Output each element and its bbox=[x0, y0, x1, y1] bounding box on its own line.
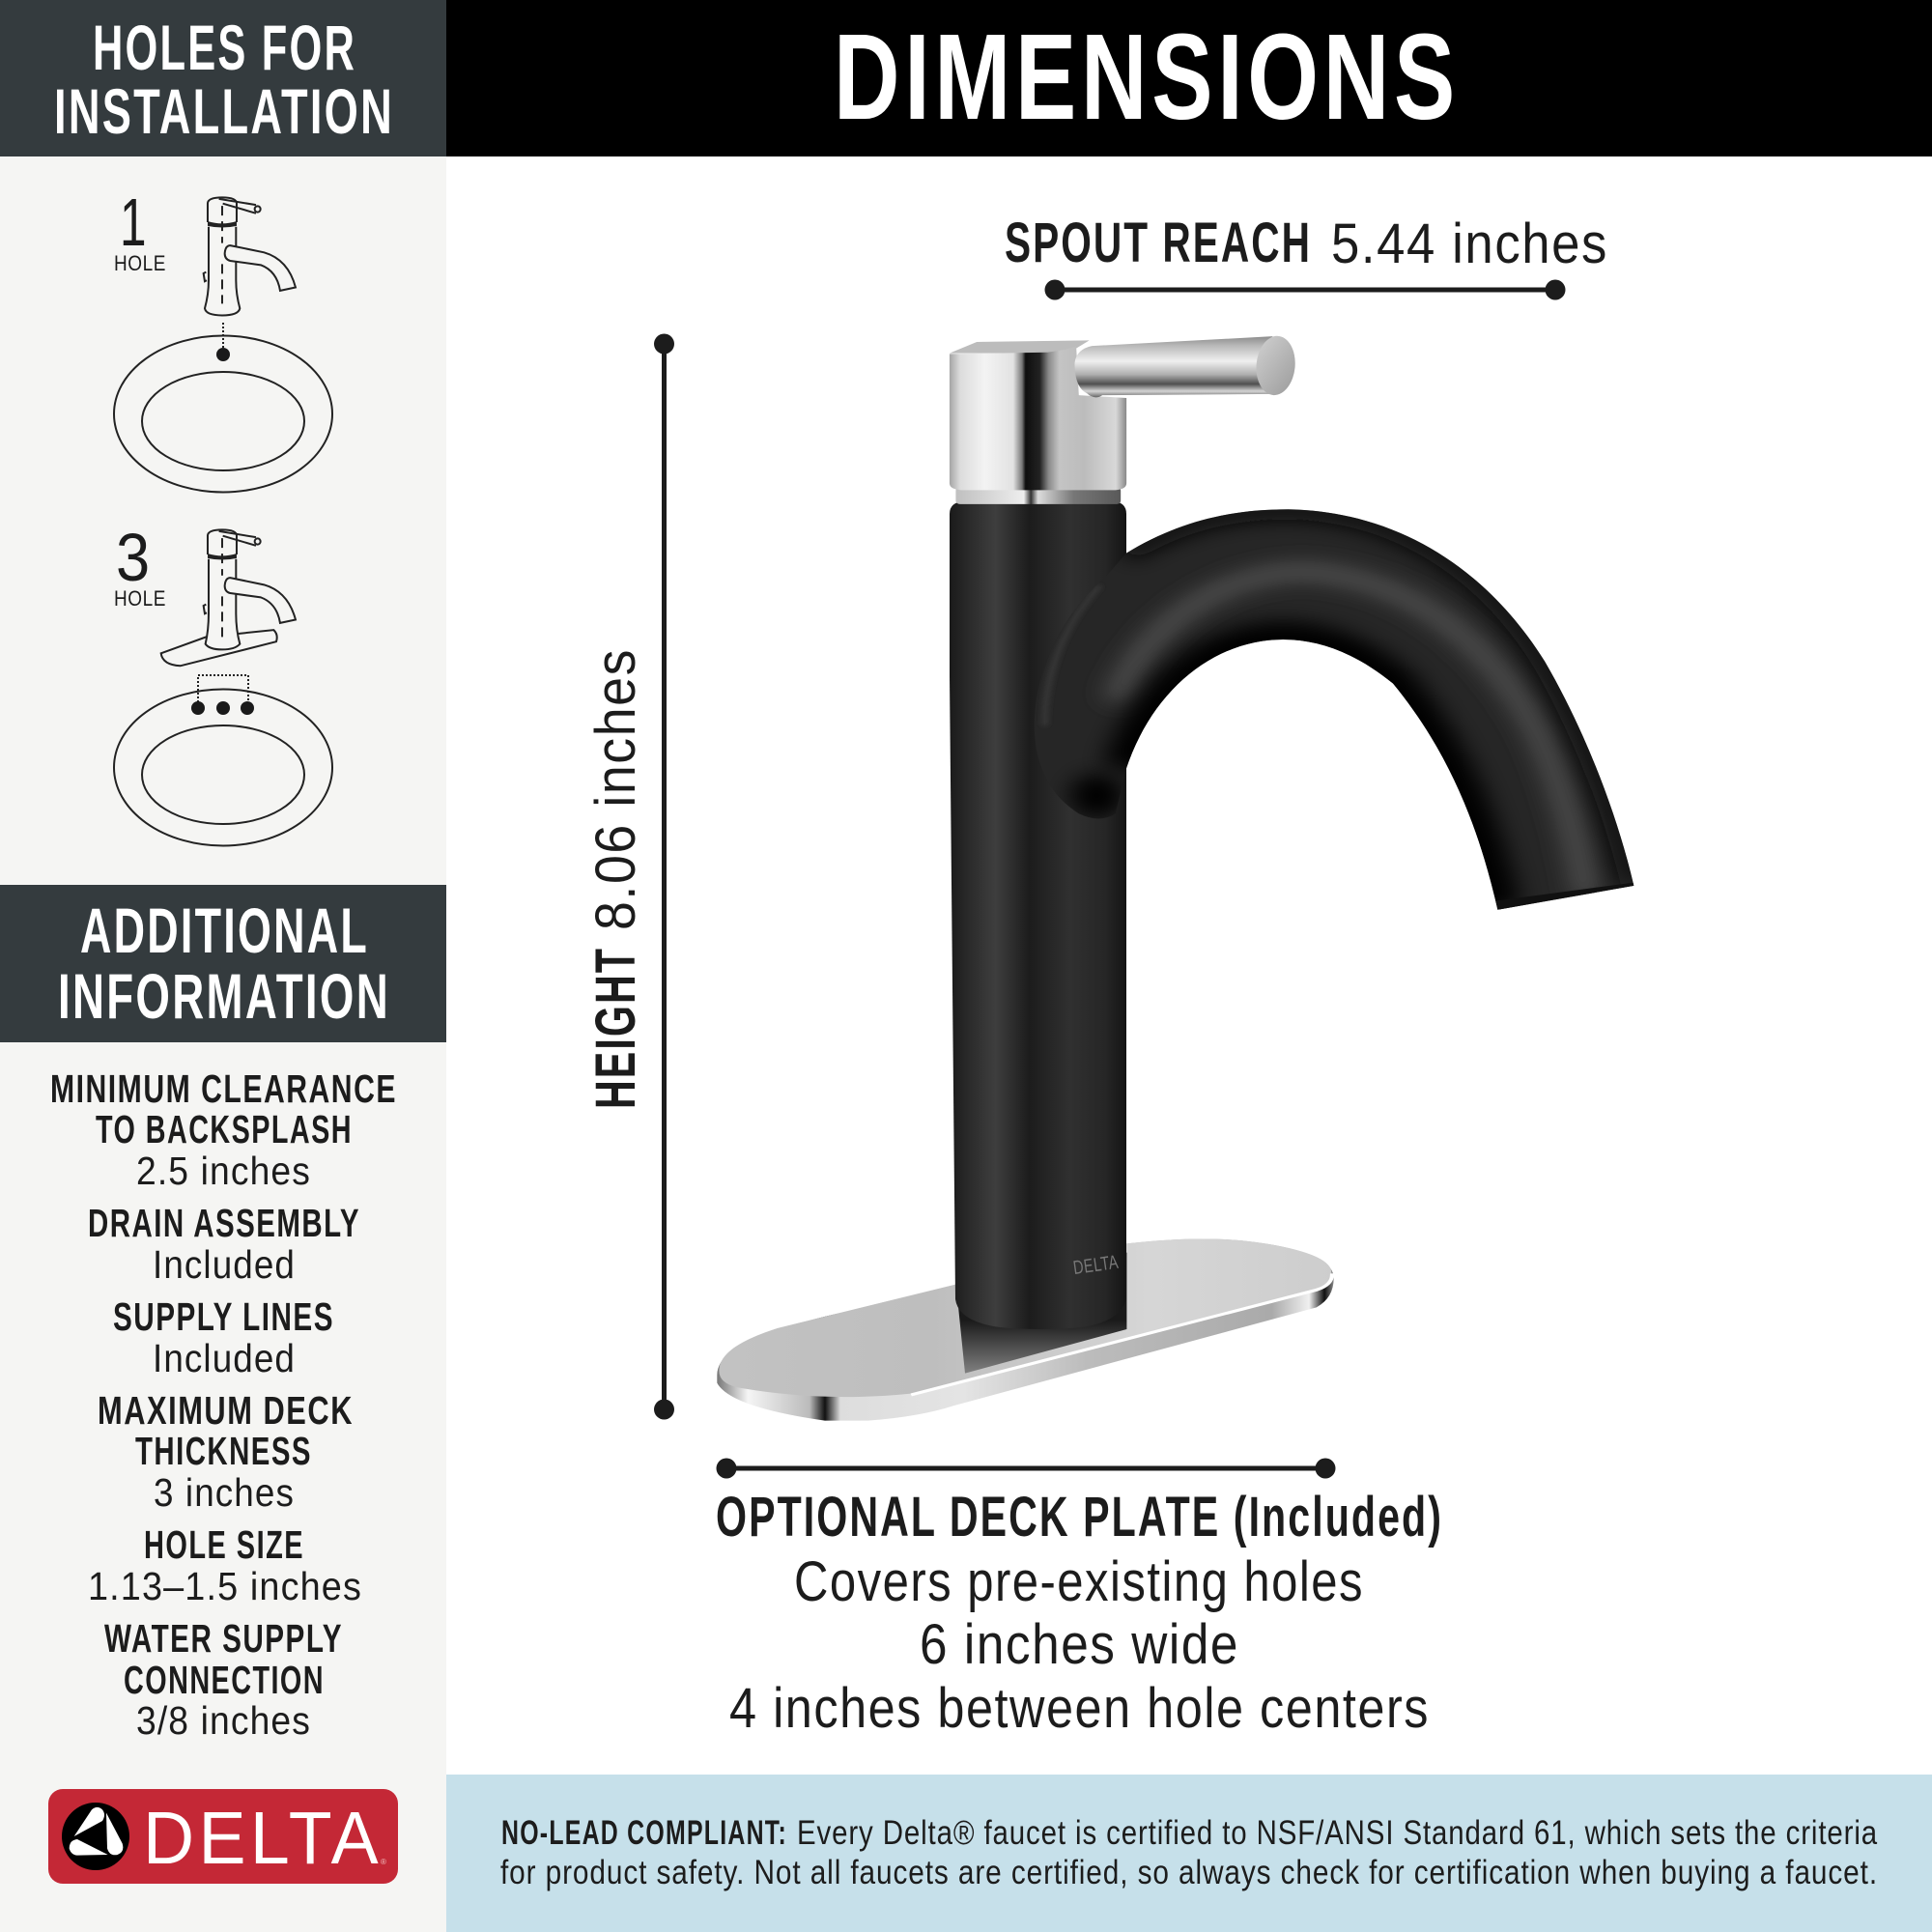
dimension: spout reach bbox=[1005, 212, 1608, 299]
dimension: spout reach: SPOUT REACH bbox=[1005, 212, 1312, 274]
heading: holes for installation: HOLES FOR bbox=[93, 12, 356, 83]
illustration: faucet bbox=[446, 335, 1932, 1932]
text block: additional information list: SUPPLY LINES bbox=[113, 1294, 334, 1339]
text block: additional information list: MINIMUM CLEARANCE bbox=[50, 1066, 397, 1111]
arrow: height span bbox=[654, 334, 674, 1420]
icon: faucet one hole bbox=[204, 197, 296, 315]
faucet body bbox=[950, 501, 1126, 1329]
dimension: height bbox=[584, 334, 674, 1420]
dotted guide bbox=[222, 323, 224, 349]
text block: additional information list: 3 inches bbox=[154, 1470, 295, 1515]
diagram: 1 hole installation: 1 bbox=[120, 185, 148, 260]
diagram: 1 hole installation: HOLE bbox=[114, 251, 166, 275]
panel: left sidebar bbox=[0, 156, 446, 1932]
dimension: deck plate bbox=[716, 1459, 1443, 1740]
icon: faucet with deck plate bbox=[161, 529, 296, 666]
arrow: deck plate span bbox=[717, 1459, 1335, 1478]
text block: additional information list: THICKNESS bbox=[135, 1429, 312, 1473]
text block: additional information list: Included bbox=[153, 1242, 296, 1287]
dimension: deck plate: OPTIONAL DECK PLATE (Included) bbox=[716, 1486, 1443, 1548]
dimension: deck plate: Covers pre-existing holes bbox=[794, 1550, 1364, 1613]
text block: additional information list bbox=[50, 1066, 397, 1743]
handle bbox=[1074, 335, 1297, 397]
text block: additional information list: DRAIN ASSEMBLY bbox=[88, 1201, 360, 1245]
text block: additional information list: 1.13–1.5 inches bbox=[88, 1564, 362, 1608]
text block: additional information list: CONNECTION bbox=[124, 1658, 325, 1702]
diagram: 3 hole installation: 3 bbox=[116, 520, 152, 595]
text block: additional information list: 3/8 inches bbox=[136, 1698, 311, 1743]
text block: additional information list: WATER SUPPLY bbox=[104, 1616, 343, 1661]
title: DIMENSIONS bbox=[834, 9, 1460, 145]
brand mark on body: DELTA bbox=[1072, 1252, 1120, 1279]
deck plate bbox=[717, 1238, 1334, 1421]
text block: additional information list: HOLE SIZE bbox=[144, 1522, 304, 1567]
heading: additional information: ADDITIONAL bbox=[80, 895, 369, 966]
heading: additional information bbox=[0, 885, 446, 1042]
callout: no-lead compliant bbox=[446, 1775, 1932, 1932]
text block: additional information list: 2.5 inches bbox=[136, 1149, 311, 1193]
dimension: deck plate: 4 inches between hole centers bbox=[729, 1677, 1430, 1740]
dimension: spout reach: 5.44 inches bbox=[1331, 213, 1608, 275]
heading: additional information: INFORMATION bbox=[58, 960, 390, 1032]
callout: no-lead compliant: NO-LEAD COMPLIANT: bbox=[501, 1814, 787, 1852]
ring bbox=[955, 487, 1121, 504]
diagram: 3 hole installation bbox=[114, 520, 332, 846]
dimension: deck plate: 6 inches wide bbox=[920, 1613, 1239, 1676]
heading: holes for installation bbox=[0, 0, 446, 156]
spout bbox=[1035, 509, 1634, 911]
logo: Delta bbox=[48, 1789, 398, 1884]
icon: basin one hole bbox=[114, 336, 332, 493]
dimension: height: HEIGHT bbox=[584, 947, 647, 1109]
dimension: height: 8.06 inches bbox=[584, 648, 647, 930]
text block: additional information list: Included bbox=[153, 1336, 296, 1380]
logo: Delta: ® bbox=[381, 1858, 386, 1866]
text block: additional information list: TO BACKSPLASH bbox=[96, 1107, 353, 1151]
logo: Delta: DELTA bbox=[143, 1797, 383, 1880]
arrow: spout reach span bbox=[1045, 280, 1565, 299]
icon: basin three holes bbox=[114, 690, 332, 846]
dotted guide bbox=[198, 675, 248, 702]
chrome cap bbox=[950, 340, 1126, 490]
panel: dimensions title bar bbox=[446, 0, 1932, 156]
diagram: 1 hole installation bbox=[114, 185, 332, 493]
heading: holes for installation: INSTALLATION bbox=[54, 75, 394, 147]
text block: additional information list: MAXIMUM DECK bbox=[98, 1388, 354, 1433]
diagram: 3 hole installation: HOLE bbox=[114, 586, 166, 611]
spout and handle bbox=[950, 335, 1634, 911]
